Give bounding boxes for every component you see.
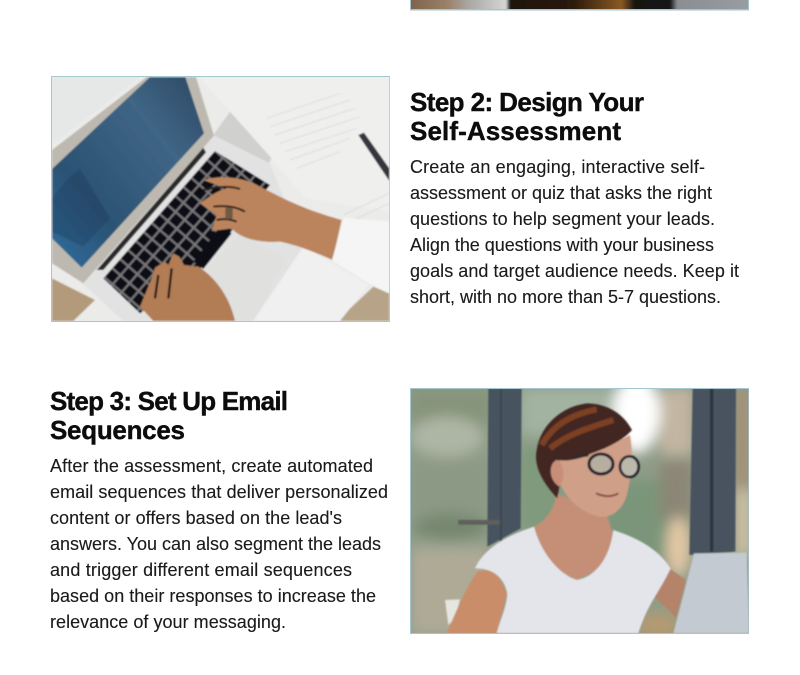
face xyxy=(559,435,632,517)
shirt xyxy=(475,527,671,633)
glasses xyxy=(573,454,639,477)
text block: step 3 description xyxy=(50,456,388,632)
window frames xyxy=(458,388,736,555)
heading: step 3 xyxy=(50,386,288,445)
text block: step 2 description: Create an engaging, interactive self- xyxy=(410,157,705,177)
laptop xyxy=(673,553,749,633)
keyboard xyxy=(103,151,270,313)
upper hand and arm xyxy=(200,177,342,260)
image: previous step photo strip xyxy=(410,0,749,10)
text block: step 3 description: answers. You can also segment the leads xyxy=(50,534,381,554)
text block: step 2 description xyxy=(410,157,739,307)
text block: step 3 description: and trigger different email sequences xyxy=(50,560,352,580)
shirt sleeve xyxy=(332,218,389,293)
heading: step 2: Step 2: Design Your xyxy=(410,87,644,117)
heading: step 3: Sequences xyxy=(50,415,185,445)
hair xyxy=(536,403,632,498)
neck and chest xyxy=(533,493,614,580)
text block: step 3 description: content or offers based on the lead's xyxy=(50,508,342,528)
heading: step 2 xyxy=(410,87,644,146)
text block: step 3 description: relevance of your messaging. xyxy=(50,612,286,632)
text block: step 2 description: goals and target audience needs. Keep it xyxy=(410,261,739,281)
hinge xyxy=(97,148,206,270)
laptop base xyxy=(83,136,303,321)
arms xyxy=(447,568,507,633)
text block: step 2 description: assessment or quiz that asks the right xyxy=(410,183,712,203)
text block: step 2 description: short, with no more than 5-7 questions. xyxy=(410,287,721,307)
pen xyxy=(358,133,389,181)
paper: document text lines xyxy=(270,94,388,210)
text block: step 2 description: Align the questions with your business xyxy=(410,235,714,255)
text block: step 3 description: based on their responses to increase the xyxy=(50,586,376,606)
lower hand xyxy=(140,253,235,321)
text block: step 3 description: email sequences that deliver personalized xyxy=(50,482,388,502)
heading: step 3: Step 3: Set Up Email xyxy=(50,386,288,416)
image: woman with glasses smiling at a laptop xyxy=(410,373,750,637)
text block: step 2 description: questions to help segment your leads. xyxy=(410,209,715,229)
wood: desk corners xyxy=(52,278,389,321)
laptop lid xyxy=(52,77,214,283)
chair xyxy=(445,599,460,625)
heading: step 2: Self-Assessment xyxy=(410,116,621,146)
paper sheet under arm xyxy=(336,308,350,321)
image: hands typing on a laptop xyxy=(50,75,393,323)
text block: step 3 description: After the assessment, create automated xyxy=(50,456,373,476)
